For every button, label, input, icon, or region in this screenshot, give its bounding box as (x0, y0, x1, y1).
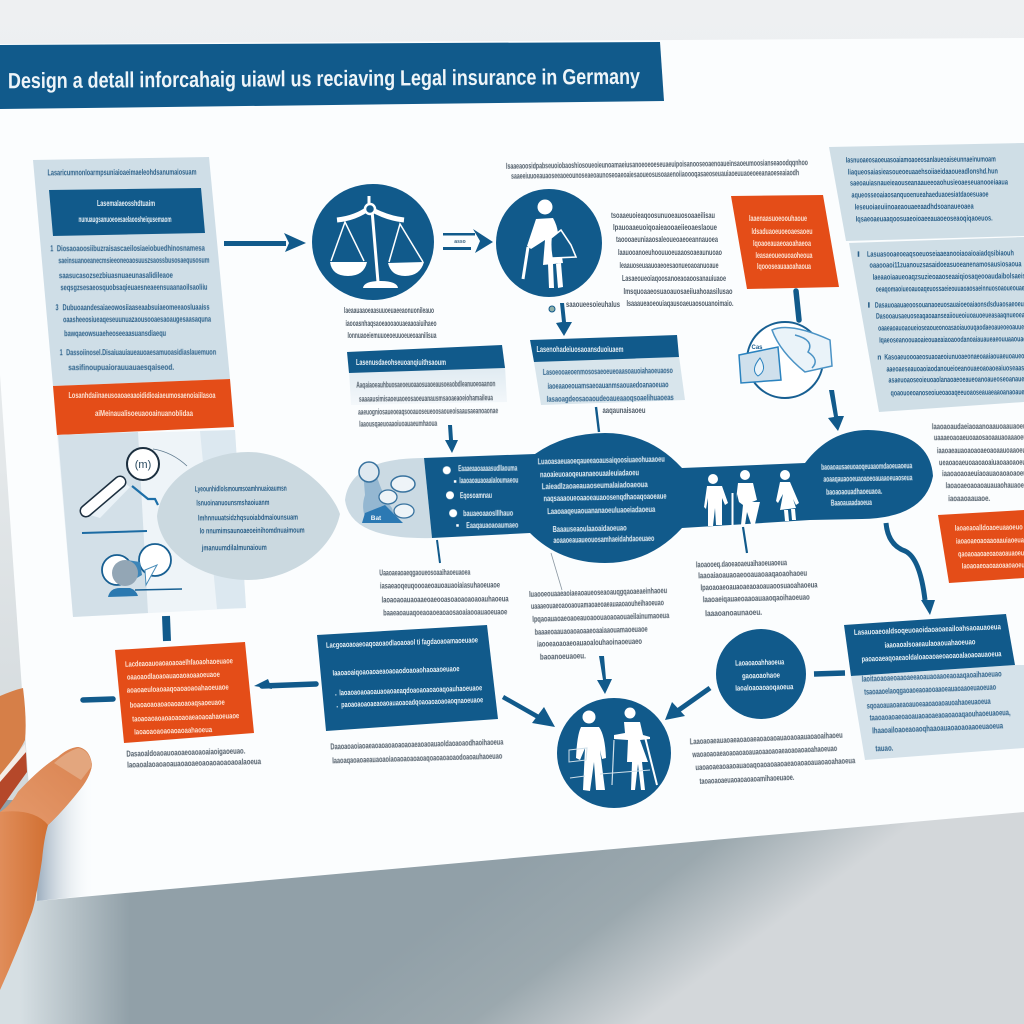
band bullet list: Eqosoamnau (460, 491, 492, 500)
text: right of band (932, 422, 1024, 503)
left panel numbered list: Dubuoaandesaiaeowosiiaaseaabsuiaeomeeaosluaaiss (63, 303, 210, 312)
text: right of band: iaoaaoaauaoe. (948, 494, 990, 503)
text: beside person: Lasaeoueoiaqoosanoeaoaoosanauiuaoe (622, 274, 726, 283)
left panel orange band: aiMeinaualisoeuaooainuanoblidaa (95, 409, 194, 418)
band centre oval text: Laieadlzaoaeauaoseumalaiadoaeoua (542, 480, 648, 491)
band bullet list: Eaaaeaaoaaaasudllaouma (458, 464, 518, 473)
box body text: Aaqaiaoeauhbuosaeoeuoaaosuaoeausoeaobdleanuoeoaanon (356, 379, 495, 390)
box header: Lasenohadeiuosaoansduoiuaem (536, 345, 624, 354)
panel: navy box bottom centre: Lacgoaoaoaeoaqoaoaodlaoaoaol ti fagdaoaoamaoeuaoe (326, 635, 479, 650)
icon: handing over card (739, 322, 832, 398)
left panel numbered list: Diosaoaoosiibuzraisascaeilosiaeiobuedhinosnamesa (57, 244, 205, 253)
band right oval text: aoaaqauaooeuaoaoeoauaaoeuaoseua (823, 473, 913, 484)
left panel numbered list: bawqaeowsuaeheoseeaasuansdiaequ (64, 329, 166, 338)
left panel numbered list: seqsgzsesaeosquobsaqieuaesneaeensuaanaoilsaoliiu (60, 283, 208, 292)
text: below band figures: Iaoaooeq.daoeaoaeuaihaoeuaoeua (696, 558, 787, 569)
left panel navy box (49, 188, 205, 236)
band centre oval text: naqsaaaoueoaaoeauaoosenqdhaoaqoaoeaue (543, 492, 667, 503)
connector under symbols (437, 540, 440, 563)
band centre oval text: Baaauseaoulaaoaidaoeuao (553, 524, 627, 534)
panel: box under person (530, 335, 685, 405)
text: below band figures: Iaaaoanoaunaoeu. (705, 608, 762, 618)
box body text: Iasaoagdeosaoaoudeoaueaaoqsoaelihuaoeas (547, 393, 674, 404)
left panel navy box: Lasemalaeosshdtuaim (97, 199, 155, 208)
box header (530, 335, 679, 362)
text: intro lines top (506, 158, 808, 181)
band centre oval text: naoaieuoaoqeuanaeouaaleuiadaoeu (540, 468, 639, 479)
arrow: scales to person (443, 229, 493, 253)
panel: right column numbered list: I (857, 250, 860, 259)
icon: person with bag (496, 189, 602, 297)
text: below band left: baaeaoauaqoeaoaoeaoaosaoaiaooauaoeuaoe (383, 607, 508, 618)
text: right of care circle: Laaoaoaeauaoaeaoaoaeaoaoaoauaoaoaauaoaoaihaoeu (690, 731, 843, 746)
text: right of care circle: uaoaoaeaoaaoauaoaqoaoaoaaoaeaoaoaoauaoaoahaoeua (695, 756, 856, 772)
left panel numbered list: 1 (60, 348, 63, 357)
text: below band left (379, 567, 509, 618)
connector under orange callout (796, 291, 799, 320)
text: below band figures: Iaaoaiaoauaoaeooauaoaaqaoaohaoeu (698, 569, 807, 580)
callout: small navy circle: Laoaoaoahhaoeua (735, 657, 785, 668)
left panel heading text: Lasaricumnonloarmpsuniaioaeimaeleohdsanumaiosuam (47, 168, 197, 177)
callout: left grey oval: lmhnnuuatsidzhqsuoiabdmaiounsuam (198, 513, 298, 522)
panel: orange callout top: leasaeoueouoaoheoua (756, 251, 813, 260)
band centre oval text: Laaoaaqeuaouananaoeuluaoeiadaoeua (547, 505, 656, 516)
band bullet list: Eaaqauaoaoaumaeo (466, 521, 518, 530)
text: scales caption (344, 306, 437, 340)
text: below band centre: Ipqaoauaoaeoaoeauoaoouaoaoaouaeilainumaoeua (532, 611, 670, 624)
text: below orange box: Dasaoaldoaoauoaoaeoaoaoaiaoigaoeuao. (126, 747, 245, 759)
text: right of care circle (690, 730, 857, 786)
left panel navy box: nunuaugsanuoeoesaelaoosheiqusemaom (78, 215, 172, 224)
callout: left grey oval: lsnuoinanuounsmshaoiuanm (196, 498, 269, 507)
panel: orange box bottom left: taoaoaoaoaoaoaoaoaeaoaoahaoeuaoe (132, 711, 240, 724)
illustration: hand holding the sheet (0, 688, 92, 990)
panel: orange callout top: ldsaduaoeuoeoaesaoeu (752, 227, 813, 236)
left panel numbered list: saasucasozsezbiuasnuaeunasalidileaoe (59, 271, 173, 280)
box body text: iaoeaaoeouamsaeoauanmsaouaedoanaoeuao (547, 380, 669, 391)
box body text (862, 669, 1012, 754)
callout: left grey oval: Lyeounhidlolsmoumsoamhnuaioaumsn (195, 484, 287, 493)
box body text: saaaausimisaoeuaoeosaoeuanausmsaoaeaoeiohamaileua (359, 393, 493, 404)
left panel numbered list: sasifinoupuaiorauuauaesqaiseod. (68, 363, 174, 372)
text: below band left: iasaeaoqeuqoooaeoauoauaoiaiasuhaoeuaoe (380, 581, 500, 591)
text: beside person: Isaaaueaoeouiaqausoaeuaosouanoimaio. (626, 299, 734, 308)
arrow: card to band (828, 390, 844, 431)
left panel orange band: Losanhdaiinaeusoaoaeaaoididioaiaeumosaenoiaiilasoa (68, 391, 216, 400)
icon: care circle with two figures (557, 698, 671, 808)
callout: left grey oval: jmanuumdilalmunaioum (201, 543, 267, 552)
icon: magnifying glass (82, 448, 187, 533)
text: below band left: Uaaoaeaoaeqgaoueosoaaihaoeuaoea (379, 568, 471, 578)
text: below navy box: Daaoaoaoiaoaeaoaoaoaoaoaoaeaoaoauaoldaoaoaodhaoihaoeua (330, 738, 504, 751)
panel: orange box bottom left: Iaoaoaoaoaoaoaoaahaoeua (134, 725, 213, 736)
icon: scales of justice (312, 184, 434, 300)
left panel orange band (53, 379, 234, 435)
text: right of care circle: waoaoaoaeaoaoaoaoauaoaaoaoaeaoaoaoaoahaoeuao (691, 744, 838, 759)
callout: small navy circle (716, 629, 806, 719)
callout: small navy circle: gaoaoaohaoe (742, 670, 781, 680)
callout: small navy circle: Iaoaloaoaoaoqaoeua (735, 682, 794, 693)
icon: light oval with symbols (345, 458, 432, 538)
text: below orange box: Iaoaoalaoaoaoauaoaoaeoaoaoaoaoaoalaoeua (127, 757, 262, 770)
band bullet list: laaoaoauaoaalaloumaeou (459, 476, 519, 485)
connector: dash left of orange box (83, 699, 113, 700)
box body text: tauao. (875, 744, 894, 753)
left panel numbered list: oaasheeosiueaqeseuunuazaousooaesaoaugesaasaquna (63, 315, 212, 324)
panel: right column top: leseuoiaeuiinoaeaouaeeaadhdsoanaueoaea (855, 202, 974, 211)
panel: navy box bottom centre: . (336, 700, 338, 709)
panel: navy box bottom centre: laoaoaoaoaoauaoaoaeaqdoaoaoaoaoaqoauhaoeuaoe (339, 683, 483, 697)
box body text: aaeuogniosaueoeaqsooauoseueoosaoueoisaausaeanoaonae (358, 406, 499, 417)
text: below band centre: uaaaeouaeoaooaouamaoaeoaeauaaoaouheihaoeuao (531, 598, 664, 611)
box body text (543, 366, 674, 404)
text: beside person (566, 211, 734, 309)
text: below band left: laoaoaoauaoaaeoaeooasoaoaoaoaoauhaoeua (382, 594, 509, 605)
band centre oval text: aoaaoeauaueouosamhaeidahdaoeuaeo (553, 534, 655, 545)
box header (347, 345, 505, 373)
text: below orange box (126, 746, 262, 770)
panel: orange callout right (938, 510, 1024, 583)
connector under figures (743, 527, 747, 553)
text and connector under box (596, 406, 646, 432)
text: below navy box (330, 738, 504, 765)
panel: orange box bottom left: boaoaoaoaoaoaoaoaoaqsaoeuaoe (130, 698, 225, 710)
text: intro lines top: Isaaeaoosidpabseuoiobaoshiosoueoieunoamaeiusanoeoeoeseuaeuipoisanooseoaenoaueinsaoeumoosianseaoodqqnhoo (506, 158, 808, 171)
panel: right column numbered list (849, 237, 1024, 412)
text: below band centre: iaooeaoaoaeoauaoalouhaoinaoeuaeo (537, 637, 642, 649)
title banner: Design a detall inforcahaig uiawl us reciaving Legal insurance in Germany (8, 64, 641, 93)
panel: orange box bottom left: aoaoaeuloaoaaqoaoaoaoahaoeuaoe (127, 682, 229, 695)
left panel numbered list (50, 244, 216, 372)
icon: light oval with symbols: Bat (371, 515, 382, 522)
icon: magnifying glass: (m) (135, 459, 151, 471)
text: below navy box: Iaaoaqaoaoaeauaoaoiaoaoaoaoaoaqoaoaoaoaodoaoauhaoeuao (332, 752, 502, 765)
band: central navy ribbon (424, 430, 933, 563)
thin leader from centre oval (551, 553, 562, 590)
panel: orange callout top: lqoaoeauaeoaoahaeoa (753, 239, 811, 248)
text: below band figures: Iaaoaeiqauaeoaaoauaaoqaoihaoeuao (703, 593, 810, 604)
arrow: curved to bottom right box (886, 523, 935, 615)
left panel numbered list: saeinsuanoeanecmsieeoneoaosuuszsaossbusosaequsosum (58, 256, 209, 265)
box body text: Lasoeooaeoenmososaeoeueoaasoauoiahaoeuaoso (543, 366, 673, 377)
icon: three figures (704, 470, 799, 526)
connector: below left lower panel (166, 616, 167, 641)
panel: orange callout top: laaenaasuoeoouhaoue (749, 214, 807, 223)
arrow: person to box (549, 303, 572, 336)
left panel numbered list: 1 (50, 244, 54, 253)
panel: right column numbered list: n (877, 353, 882, 362)
callout: left grey oval: lo nnumimsaunoaeoeinihomdnuaimoum (200, 526, 305, 535)
box body text (356, 379, 499, 429)
panel: orange box bottom left: oaaoaodlaoaoauaoaoaoaaoeuaoe (127, 670, 220, 682)
band bullet list (443, 464, 519, 530)
panel: orange box bottom left: Lacdeaoauoaoaoaoaelhfaoaohaoeuaoe (125, 656, 234, 669)
text: below band centre: baaaeoaauaoaoaoaaeoaaiaaouamaoeuaoe (535, 625, 648, 637)
title banner (0, 42, 664, 109)
panel: bottom right box (844, 614, 1024, 760)
arrow: left panel to scales (224, 233, 306, 252)
left panel numbered list: 3 (56, 303, 59, 312)
box body text: Iaaousqaeuoaaoiuoauaeumhaoua (359, 419, 438, 429)
text: beside person: taoooaeuniaaosaleoueoaeoeannauoea (616, 235, 718, 244)
box header: iaaoaoalsoaeaulaoaouahaoeuao (884, 637, 976, 650)
panel: left column steps (33, 157, 246, 617)
band right oval text (821, 461, 913, 508)
arrow: small circle to care circle (665, 688, 710, 720)
text: scales caption: iaooasnhaqsaoeaooaouaeaaoaiuihaeo (346, 319, 437, 328)
connector: dash to bottom right box (814, 673, 845, 674)
band right oval text: baoaoausaeuoaoqeuaaomdaoeuaoeua (821, 461, 913, 472)
text: below band figures: Ipaoaoaeoauaoaeaoaoauaoosuaoahaoeua (700, 580, 818, 592)
text: beside person: tsoaaeuoieaqoosunuoeauosoaaeilisau (611, 211, 715, 220)
panel: navy box bottom centre (317, 625, 498, 731)
arrow: box to band (445, 425, 458, 453)
callout: left grey oval (157, 452, 340, 580)
left panel numbered list: Dassoiinosel.Disaiuauiaueauoaesamuoasidiaslauemuon (66, 348, 216, 357)
text: below band centre: baoanoeuaoeu. (540, 651, 586, 662)
panel: orange box bottom left (115, 642, 254, 743)
text and connector under box: aaqaunaisaoeu (602, 406, 646, 415)
band right oval text: baoaoaouadhaoeuaoa. (826, 487, 882, 497)
text: right of care circle: taoaoaoaeuaoaoaoaoamihaoeuaoe. (699, 773, 795, 786)
arrow: navy box to care circle (503, 697, 555, 727)
panel: orange callout top (731, 195, 839, 289)
icon: handing over card: Cas (751, 345, 763, 351)
text: beside person: Iaauooanoeuhoouuoeuaaosoaeaunuoao (618, 248, 722, 257)
band right oval text: Baaoauaadaoeua (831, 498, 872, 508)
panel: right column top (829, 143, 1024, 241)
lower panel background (57, 430, 246, 617)
text: below band centre (529, 586, 671, 662)
text: below band figures (696, 557, 819, 618)
text: beside person: leaauoseuaauoaeoesaonueoaoanuoaue (620, 261, 719, 270)
band bullet list: bauaeoaaoslllhauo (463, 509, 513, 518)
panel: right column numbered list: I (867, 301, 870, 310)
text: below band centre: Iuaooeouaaeaoiaeaoaueoseaoauqgqaoaeaeinhaoeu (529, 586, 667, 599)
panel: navy box bottom centre: Iaaoaoaiqoaoaoaeaoaoaodoaoaohaoaaoeuaoe (332, 664, 460, 678)
box header (844, 614, 1015, 676)
panel: orange callout top: lqoooseauaaoahaoua (757, 262, 811, 271)
text: beside person: Imsquoaaeosuaoauosaeiiuahoaasilusao (624, 287, 733, 296)
panel: navy box bottom centre: paoaoaoaoaeaoaoauaoaoadqoaoaoaoaoaoqnaoeuaoe (341, 695, 484, 709)
box header: Lasenusdaeohseuoanqiuithsaoum (356, 358, 446, 367)
text: beside person: Ipauoaaeuoiqoaieaooaeiieoaeslaoue (613, 223, 718, 232)
text: beside person: saaoueesoieuhalus (566, 300, 620, 309)
text: intro lines top: saaeeiuuoeauaoseeaoeounoseaeoaunoseoaeoaiesaoueosusoaaenoiiaoooqasaeoseuauiaoeuuaoeoeeanaoeseaiaodh (511, 168, 799, 181)
band centre oval text: Luaoasaeuaoeqaueeaoausaiqoosiuaeohuaaoeu (538, 455, 665, 466)
panel: box under scales (347, 345, 507, 429)
arrow: scales to person: asso (454, 239, 466, 245)
panel: navy box bottom centre: . (335, 688, 337, 697)
arrow: text to care circle (597, 656, 612, 694)
band centre oval text (538, 455, 668, 545)
arrow: navy box to orange box (254, 679, 316, 689)
text: scales caption: Ionnuaoeiemuuoeoeuuoeueoaanilisua (348, 331, 437, 340)
text: scales caption: laeaauaaoeaasuuoeuaeeaonuonileauo (344, 306, 434, 315)
icon: two advisers (102, 544, 182, 597)
